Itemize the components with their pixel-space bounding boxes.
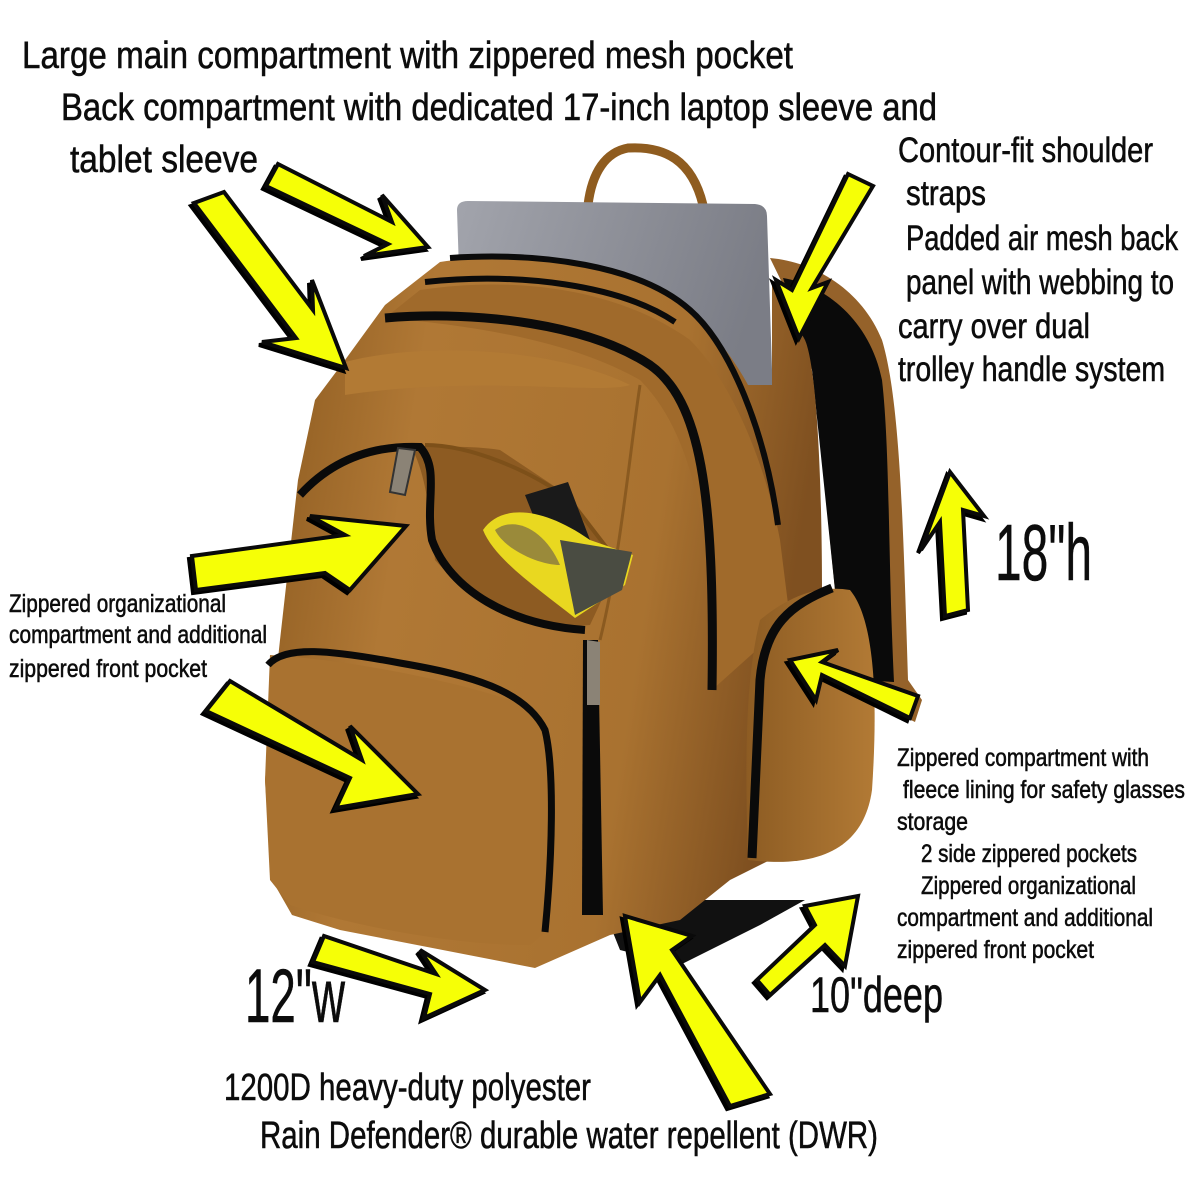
bottom shadow panel: [600, 900, 805, 965]
heading: main compartment text: tablet sleeve: [70, 139, 258, 181]
text: side pockets: [897, 744, 1185, 964]
zipper pull: [390, 448, 415, 495]
dimension: width: 12"w: [245, 954, 346, 1039]
text: side pockets: compartment and additional: [897, 904, 1153, 932]
center zipper pull: [587, 640, 600, 705]
dimension: depth: 10"deep: [810, 967, 943, 1023]
text: material: Rain Defender® durable water repellent (DWR): [260, 1115, 878, 1157]
text: organizational compartment: [9, 590, 267, 683]
heading: main compartment text: [22, 35, 937, 181]
text: side pockets: Zippered compartment with: [897, 744, 1149, 772]
heading: main compartment text: Large main compartment with zippered mesh pocket: [22, 35, 793, 77]
arrow: organizer pocket: [192, 516, 406, 590]
backpack illustration: [265, 148, 922, 968]
vertical center zipper: [582, 640, 603, 915]
laptop in back sleeve: [457, 201, 773, 400]
text: organizational compartment: zippered front pocket: [9, 655, 207, 683]
arrow: shoulder straps: [776, 174, 873, 338]
arrow: laptop compartment: [194, 192, 346, 368]
text: side pockets: Zippered organizational: [921, 872, 1136, 900]
arrow: depth: [757, 896, 858, 995]
back shoulder strap: [770, 258, 922, 722]
text: shoulder straps and back panel: carry over dual: [898, 307, 1090, 346]
main pack body: [265, 258, 822, 968]
text: shoulder straps and back panel: straps: [906, 174, 986, 213]
arrow: polyester material: [625, 916, 770, 1106]
text: side pockets: storage: [897, 808, 968, 836]
text: shoulder straps and back panel: [898, 131, 1178, 389]
arrow: height: [921, 472, 984, 616]
text: material: 1200D heavy-duty polyester: [224, 1067, 591, 1109]
arrow: front pocket: [206, 681, 418, 808]
arrow: side pocket: [790, 650, 918, 718]
main zippers: [385, 257, 778, 690]
side pocket: [746, 588, 875, 862]
upper compartment layers: [385, 284, 790, 690]
text: side pockets: zippered front pocket: [897, 936, 1094, 964]
lower front pocket: [265, 652, 552, 945]
top carry handle: [588, 148, 703, 205]
text: shoulder straps and back panel: Contour-fit shoulder: [898, 131, 1153, 170]
organizer pocket opening: [300, 445, 620, 630]
text: side pockets: 2 side zippered pockets: [921, 840, 1137, 868]
tape measure: [483, 482, 633, 618]
text: material: [224, 1067, 878, 1157]
dimension: height: 18"h: [995, 508, 1092, 597]
front panel seam: [600, 385, 640, 640]
arrow: width: [313, 936, 485, 1018]
arrow: main compartment: [266, 164, 428, 256]
text: organizational compartment: compartment and additional: [9, 621, 267, 649]
top flap shading: [345, 350, 630, 395]
heading: main compartment text: Back compartment with dedicated 17-inch laptop sleeve and: [61, 87, 937, 129]
text: organizational compartment: Zippered organizational: [9, 590, 226, 618]
